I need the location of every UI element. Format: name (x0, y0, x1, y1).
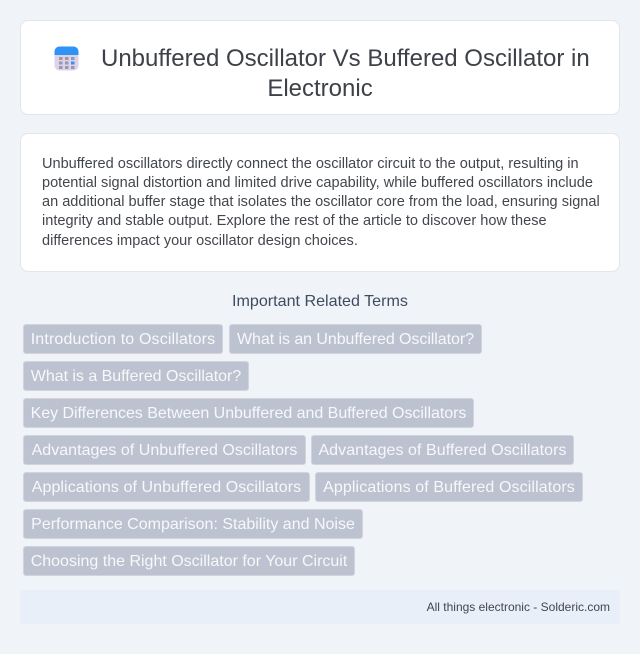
tag (23, 472, 310, 502)
text block: description: potential signal distortion and limited drive capability, while buffered oscillators include (42, 175, 593, 191)
heading: related terms: Important Related Terms (232, 292, 408, 310)
tag (23, 435, 306, 465)
tag: What is a Buffered Oscillator? (31, 368, 241, 385)
tag (23, 324, 223, 354)
tag: Introduction to Oscillators (31, 331, 215, 348)
text block: description: integrity and stable output. Explore the rest of the article to discover how these (42, 213, 547, 229)
text block: description: Unbuffered oscillators directly connect the oscillator circuit to the output, resulting in (42, 156, 579, 172)
tag: Applications of Buffered Oscillators (323, 479, 575, 496)
tag (23, 398, 474, 428)
title (101, 45, 590, 102)
tag: Choosing the Right Oscillator for Your Circuit (31, 553, 347, 570)
tag (23, 509, 363, 539)
text block: description: differences impact your oscillator design choices. (42, 233, 358, 249)
tag (315, 472, 583, 502)
tag (311, 435, 574, 465)
tag: Performance Comparison: Stability and Noise (31, 516, 355, 533)
footer bar (20, 590, 620, 624)
tag (229, 324, 482, 354)
tag: Applications of Unbuffered Oscillators (32, 479, 301, 496)
panel: intro description (20, 133, 620, 272)
text block: description (42, 156, 600, 249)
panel: title card (20, 20, 620, 115)
icon: calendar (54, 46, 78, 70)
footer credit: All things electronic - Solderic.com (427, 600, 610, 614)
tag (23, 546, 355, 576)
title: Electronic (267, 75, 373, 102)
text block: description: an additional buffer stage that isolates the oscillator core from the load, ensuring signal (42, 194, 600, 210)
tag: What is an Unbuffered Oscillator? (237, 331, 474, 348)
tag: Key Differences Between Unbuffered and Buffered Oscillators (31, 405, 466, 422)
tag (23, 361, 249, 391)
title: Unbuffered Oscillator Vs Buffered Oscillator in (101, 45, 590, 72)
tag: Advantages of Buffered Oscillators (318, 442, 567, 459)
tag: Advantages of Unbuffered Oscillators (32, 442, 297, 459)
panel: related term tags (23, 324, 583, 576)
